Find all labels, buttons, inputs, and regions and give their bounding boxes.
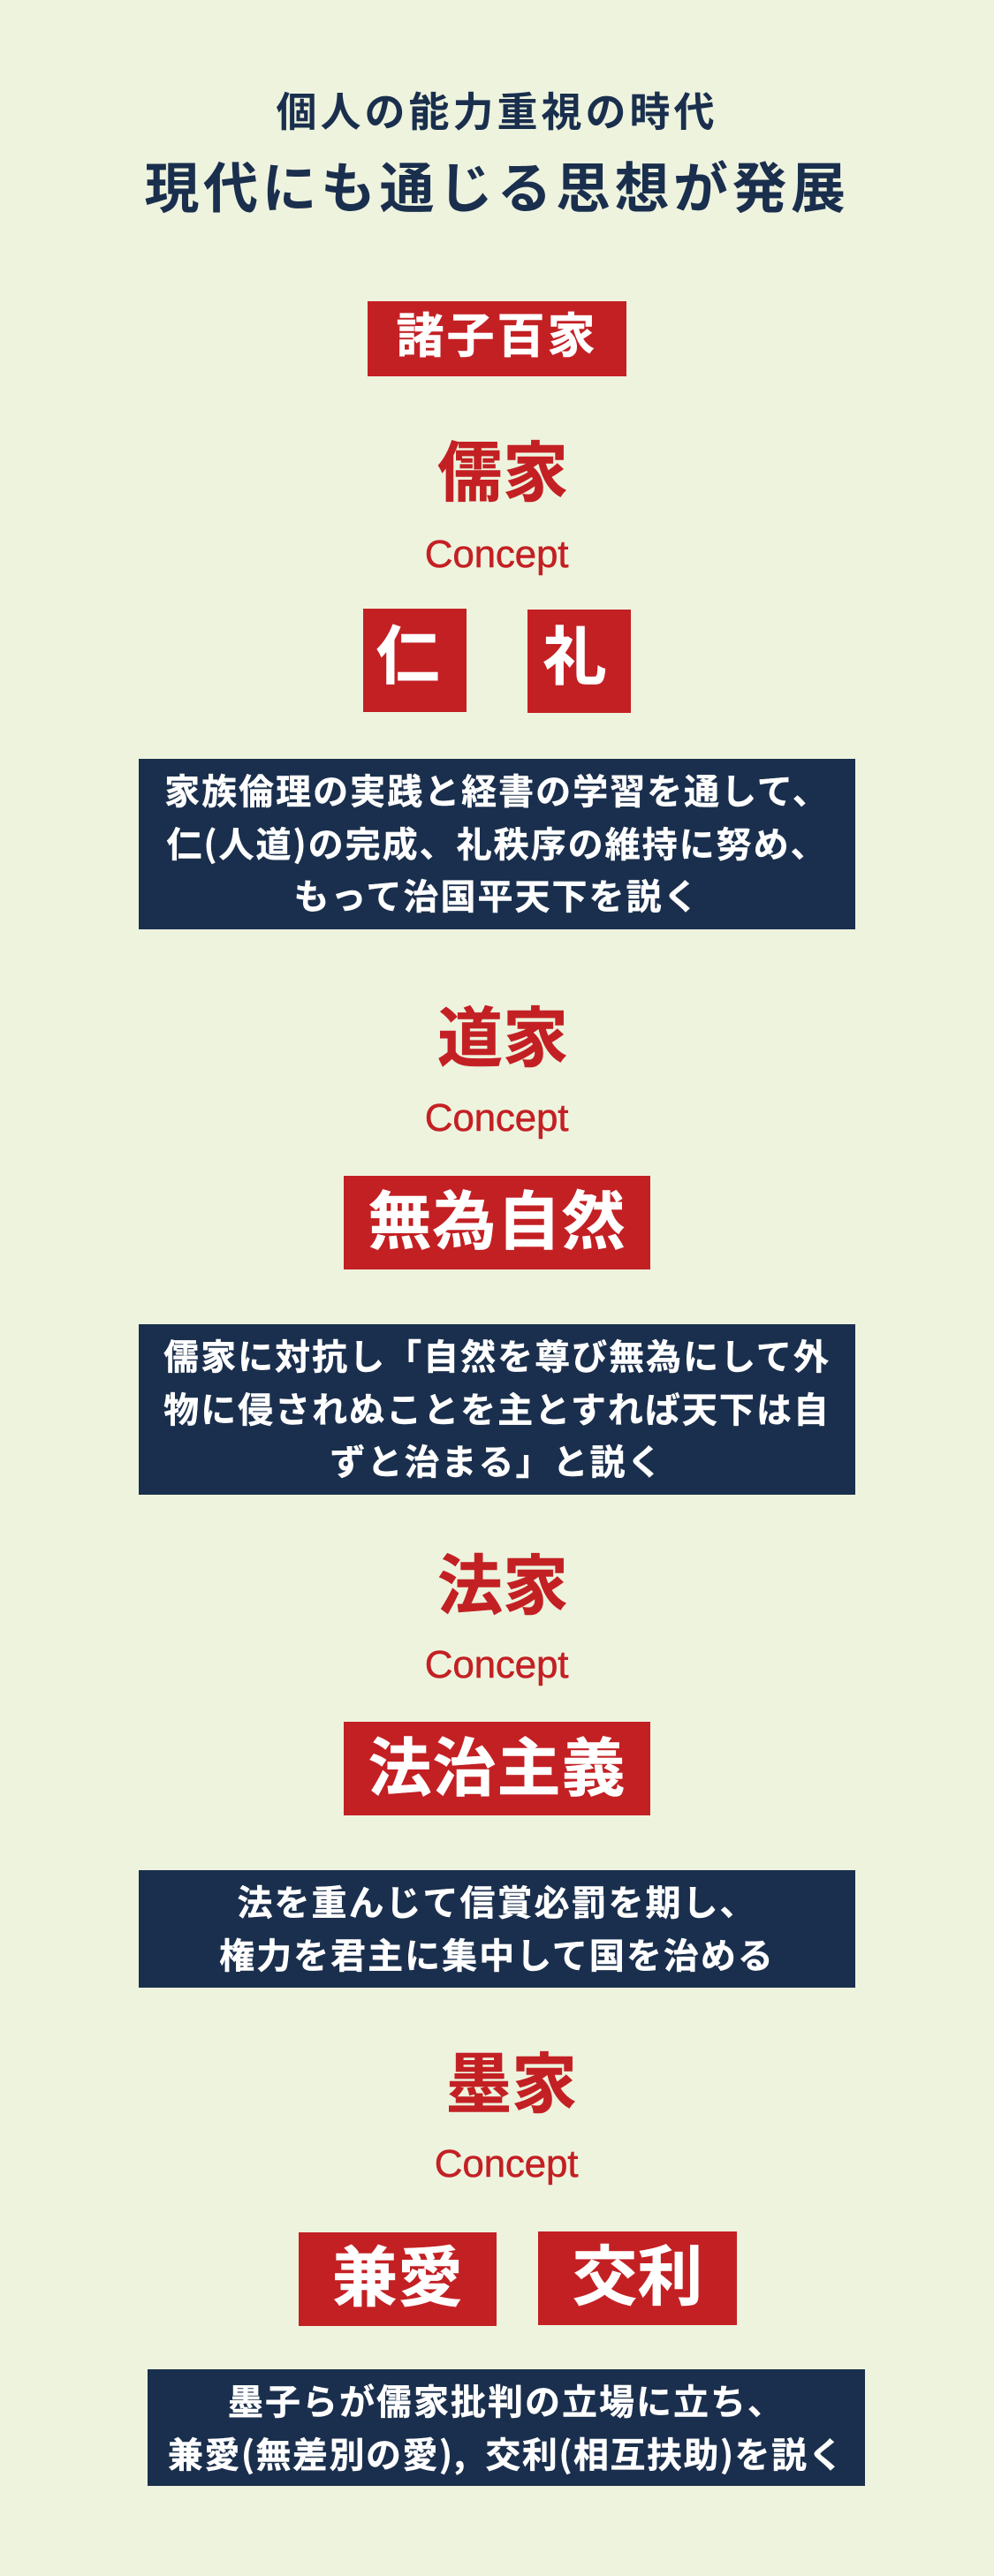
title line 2: 現代にも通じる思想が発展 [144,144,850,224]
description: 道家: 物に侵されぬことを主とすれば天下は自 [163,1382,831,1433]
concept badge: 交利 [538,2231,737,2325]
concept label: Concept [425,1096,568,1140]
description: 法家: 法を重んじて信賞必罰を期し、 [237,1875,756,1926]
description: 儒家 [139,759,855,929]
concept label: Concept [435,2142,578,2186]
concept label: Concept [425,533,568,576]
concept badge: 無為自然: 無為自然 [368,1170,626,1262]
school heading: 墨家: 墨家 [446,2032,577,2126]
description: 道家: 儒家に対抗し「自然を尊び無為にして外 [163,1329,831,1380]
concept badge: 兼愛 [299,2232,497,2326]
description: 墨家: 兼愛(無差別の愛), 交利(相互扶助)を説く [168,2426,845,2477]
concept badge: 仁: 仁 [376,604,440,697]
description: 道家: ずと治まる」と説く [330,1434,664,1485]
concept badge: 交利: 交利 [573,2224,703,2319]
title line 1: 個人の能力重視の時代 [276,80,717,139]
description: 法家: 権力を君主に集中して国を治める [219,1928,775,1979]
school heading: 儒家: 儒家 [437,420,568,515]
concept badge: 法治主義: 法治主義 [368,1716,626,1809]
description: 法家 [139,1870,855,1988]
description: 儒家: もって治国平天下を説く [293,868,700,920]
title [144,80,850,224]
school heading: 法家: 法家 [437,1534,568,1628]
concept badge: 礼 [527,610,631,713]
description: 儒家: 家族倫理の実践と経書の学習を通して、 [164,763,830,814]
concept badge: 仁 [363,609,467,712]
description: 墨家 [148,2369,865,2486]
concept label: Concept [425,1643,568,1686]
concept badge: 礼: 礼 [543,605,606,698]
heading badge: 諸子百家 [368,301,626,376]
concept badge: 兼愛: 兼愛 [332,2225,463,2320]
description: 道家 [139,1324,855,1495]
description: 儒家: 仁(人道)の完成、礼秩序の維持に努め、 [166,816,828,868]
heading badge: 諸子百家: 諸子百家 [396,297,597,367]
school heading: 道家: 道家 [437,986,568,1080]
description: 墨家: 墨子らが儒家批判の立場に立ち、 [228,2374,785,2425]
